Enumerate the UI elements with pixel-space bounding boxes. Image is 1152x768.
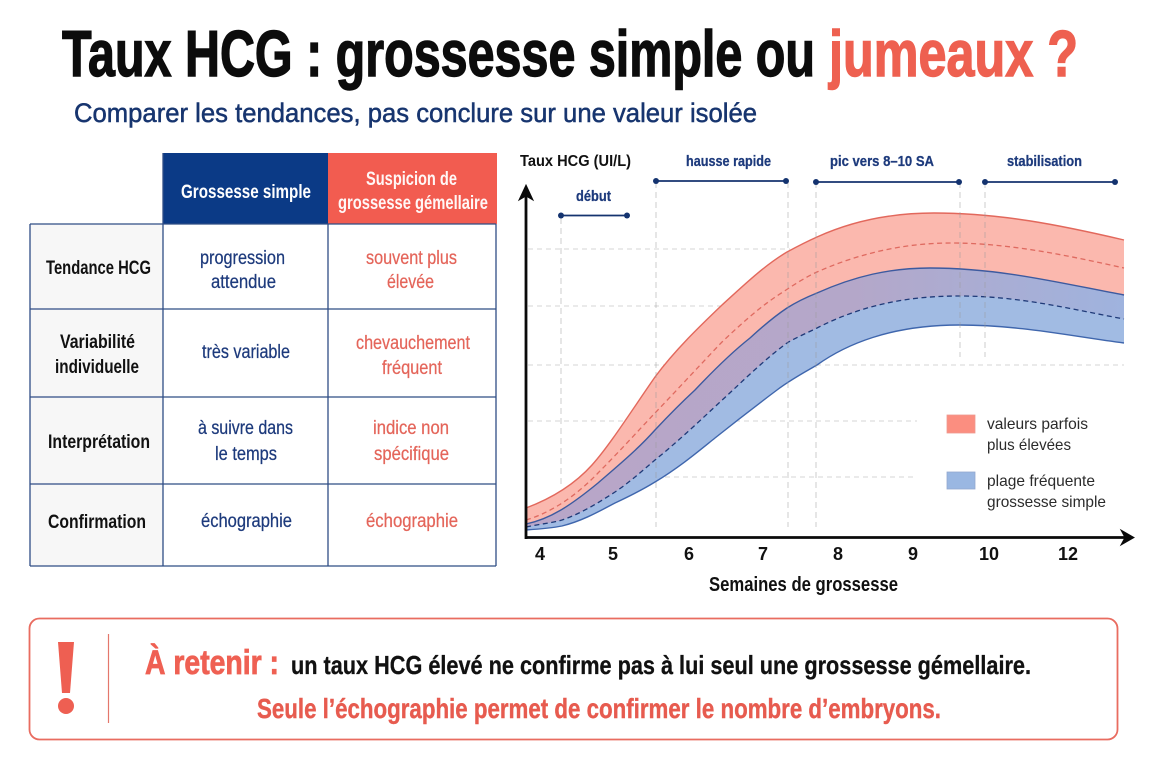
curve: blue lower edge — [526, 325, 1124, 530]
legend: pink: plus élevées — [987, 437, 1071, 454]
x axis ticks: 10 — [979, 544, 999, 564]
legend: pink — [947, 415, 1088, 454]
y axis title: Taux HCG (UI/L) — [520, 153, 631, 170]
phase: hausse rapide — [653, 153, 789, 184]
curve: pink upper edge — [526, 213, 1124, 508]
panel: comparison table — [30, 153, 497, 566]
x axis ticks: 6 — [684, 544, 694, 564]
legend: blue: plage fréquente — [987, 473, 1095, 490]
vertical phase guides — [561, 182, 985, 527]
x axis ticks: 4 — [535, 544, 545, 564]
row: tendance HCG: progression — [200, 248, 285, 269]
row: variabilite individuelle: Variabilité — [60, 332, 135, 353]
horizontal grid lines — [528, 249, 1124, 477]
phase: pic: pic vers 8–10 SA — [830, 153, 934, 170]
row: confirmation: Confirmation — [48, 512, 146, 533]
row: tendance HCG — [46, 248, 457, 293]
legend — [947, 415, 1106, 511]
x axis ticks: 12 — [1058, 544, 1078, 564]
curve: blue upper edge — [526, 268, 1124, 524]
curve: pink median — [526, 243, 1124, 520]
row: variabilite individuelle: très variable — [202, 342, 290, 363]
icon: exclamation mark — [58, 642, 74, 714]
x axis ticks — [535, 544, 1078, 564]
row: tendance HCG: Tendance HCG — [46, 258, 151, 279]
x axis ticks: 5 — [608, 544, 618, 564]
title: jumeaux ? — [827, 17, 1078, 90]
row: tendance HCG: élevée — [387, 272, 434, 293]
row: interpretation: le temps — [215, 444, 277, 465]
key message: Seule l’échographie permet de confirmer le nombre d’embryons. — [257, 693, 941, 724]
row: interpretation: spécifique — [374, 444, 449, 465]
key message: À retenir : — [145, 644, 279, 682]
row: interpretation — [48, 418, 449, 465]
band: pink range — [526, 213, 1124, 527]
phase: pic — [813, 153, 962, 185]
row: variabilite individuelle — [55, 332, 471, 379]
row: confirmation: échographie — [201, 511, 292, 532]
x axis title: Semaines de grossesse — [709, 574, 898, 596]
legend: blue: grossesse simple — [987, 494, 1106, 511]
phase: debut: début — [576, 188, 611, 205]
curve: blue median — [526, 296, 1124, 527]
row: variabilite individuelle: individuelle — [55, 357, 139, 378]
row: tendance HCG: attendue — [211, 272, 276, 293]
callout — [30, 618, 1118, 740]
band: blue range — [526, 268, 1124, 530]
phase: stabilisation: stabilisation — [1007, 153, 1082, 170]
row: variabilite individuelle: chevauchement — [356, 333, 471, 354]
header: suspicion de grossesse gemellaire: grossesse gémellaire — [338, 193, 488, 214]
row: interpretation: à suivre dans — [198, 418, 293, 439]
phase: stabilisation — [982, 153, 1118, 185]
row: interpretation: indice non — [373, 418, 449, 439]
title: Taux HCG : grossesse simple ou — [62, 17, 815, 90]
key message: un taux HCG élevé ne confirme pas à lui seul une grossesse gémellaire. — [291, 650, 1031, 680]
row: confirmation — [48, 511, 458, 533]
legend: pink: valeurs parfois — [987, 416, 1088, 433]
phase: hausse rapide: hausse rapide — [686, 153, 771, 170]
legend: blue — [947, 472, 1106, 511]
row: confirmation: échographie — [366, 511, 458, 532]
chart: HCG curves — [519, 153, 1134, 596]
x axis ticks: 7 — [758, 544, 768, 564]
row label column background — [30, 224, 163, 566]
x axis ticks: 8 — [833, 544, 843, 564]
row: interpretation: Interprétation — [48, 432, 150, 453]
row: variabilite individuelle: fréquent — [382, 358, 443, 379]
x axis ticks: 9 — [908, 544, 918, 564]
band: overlap — [526, 268, 1124, 527]
row: tendance HCG: souvent plus — [366, 248, 457, 269]
header: suspicion de grossesse gemellaire — [328, 153, 497, 224]
axes — [519, 185, 1134, 545]
key message — [145, 644, 1031, 724]
header: suspicion de grossesse gemellaire: Suspicion de — [366, 169, 457, 190]
header: grossesse simple: Grossesse simple — [181, 182, 311, 203]
phase: debut — [558, 188, 630, 218]
header: grossesse simple — [163, 153, 328, 224]
subtitle: Comparer les tendances, pas conclure sur une valeur isolée — [74, 98, 757, 128]
